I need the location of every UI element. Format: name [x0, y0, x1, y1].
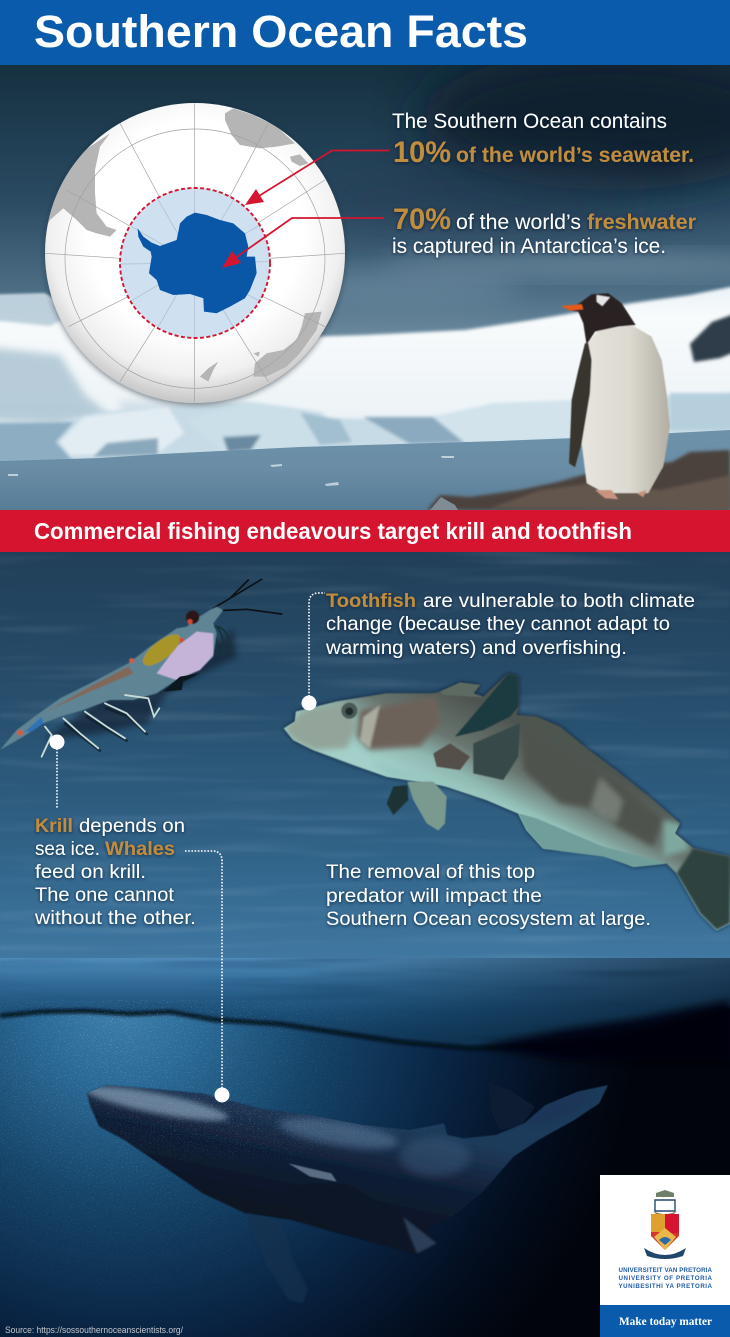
- callout: krill and whales text: [34, 815, 196, 929]
- icon: toothfish: [284, 673, 730, 930]
- callout: toothfish text: change (because they cannot adapt to: [326, 613, 670, 635]
- university name: UNIVERSITEIT VAN PRETORIA: [618, 1267, 713, 1274]
- heading: Commercial fishing endeavours target krill and toothfish: [34, 518, 632, 544]
- whale pectoral fin: [289, 1183, 437, 1255]
- callout: krill and whales text: Whales: [105, 838, 175, 860]
- callout: toothfish text: Toothfish: [326, 590, 416, 612]
- text block: top predator note: [326, 861, 651, 930]
- title: Southern Ocean Facts: [34, 6, 528, 57]
- background snowfield: [0, 284, 730, 433]
- panel: antarctic landscape photo: [0, 50, 730, 510]
- callout: toothfish text: are vulnerable to both climate: [423, 590, 695, 612]
- connector: whale dotted leader: [185, 851, 230, 1102]
- callout: krill and whales text: The one cannot: [35, 884, 175, 906]
- university name: YUNIBESITHI YA PRETORIA: [618, 1283, 713, 1290]
- text block: 10% seawater: 10%: [393, 136, 451, 169]
- callout: krill and whales text: Krill: [35, 815, 73, 837]
- icon: krill: [0, 579, 282, 757]
- text block: 70% freshwater: of the world’s: [456, 211, 581, 234]
- icon: humpback whale: [81, 1079, 608, 1303]
- text block: 10% seawater: [392, 110, 694, 169]
- text block: 10% seawater: of the world’s seawater.: [456, 144, 694, 167]
- grey continents: [43, 108, 322, 382]
- chart: south polar globe map: [43, 103, 345, 403]
- graticule: [45, 103, 345, 402]
- text block: top predator note: Southern Ocean ecosystem at large.: [326, 908, 651, 930]
- tagline: Make today matter: [619, 1316, 712, 1328]
- text block: 70% freshwater: is captured in Antarctica’s ice.: [392, 235, 666, 258]
- text block: 70% freshwater: freshwater: [587, 211, 696, 234]
- arrow: to Antarctica: [222, 218, 384, 268]
- panel: University of Pretoria logo: [600, 1175, 730, 1337]
- fish fins: [341, 673, 667, 867]
- connector: krill dotted leader: [50, 734, 64, 809]
- callout: krill and whales text: without the other.: [34, 907, 196, 929]
- callout: toothfish text: [325, 590, 695, 659]
- icon: crest: [644, 1190, 686, 1259]
- panel: deep water: [0, 1000, 730, 1337]
- text block: 70% freshwater: 70%: [393, 203, 451, 236]
- callout: krill and whales text: sea ice.: [35, 838, 100, 860]
- text block: top predator note: predator will impact the: [326, 885, 542, 907]
- Antarctica: [138, 213, 257, 313]
- university name: UNIVERSITY OF PRETORIA: [618, 1275, 713, 1282]
- callout: krill and whales text: depends on: [79, 815, 185, 837]
- callout: krill and whales text: feed on krill.: [35, 861, 146, 883]
- whale lower fin: [246, 1213, 308, 1303]
- connector: toothfish dotted leader: [302, 593, 325, 710]
- glacier cliffs: [0, 392, 730, 463]
- panel: ocean surface from below: [0, 958, 730, 1053]
- rocky foreground: [427, 450, 730, 510]
- panel: underwater ocean background: [0, 552, 730, 960]
- dark mountain rocks: [690, 312, 730, 362]
- text block: top predator note: The removal of this top: [326, 861, 535, 883]
- icon: gentoo penguin: [561, 293, 670, 499]
- text block: 10% seawater: The Southern Ocean contains: [392, 110, 667, 133]
- panel: red heading band: [0, 510, 730, 552]
- sea: [0, 430, 730, 510]
- panel: title bar: [0, 0, 730, 65]
- university name: [618, 1267, 713, 1290]
- callout: toothfish text: warming waters) and overfishing.: [325, 637, 627, 659]
- southern ocean zone: [120, 188, 270, 338]
- arrow: to Southern Ocean boundary: [245, 150, 389, 205]
- text block: 70% freshwater: [392, 203, 696, 258]
- source note: Source: https://sossouthernoceanscientists.org/: [5, 1325, 183, 1335]
